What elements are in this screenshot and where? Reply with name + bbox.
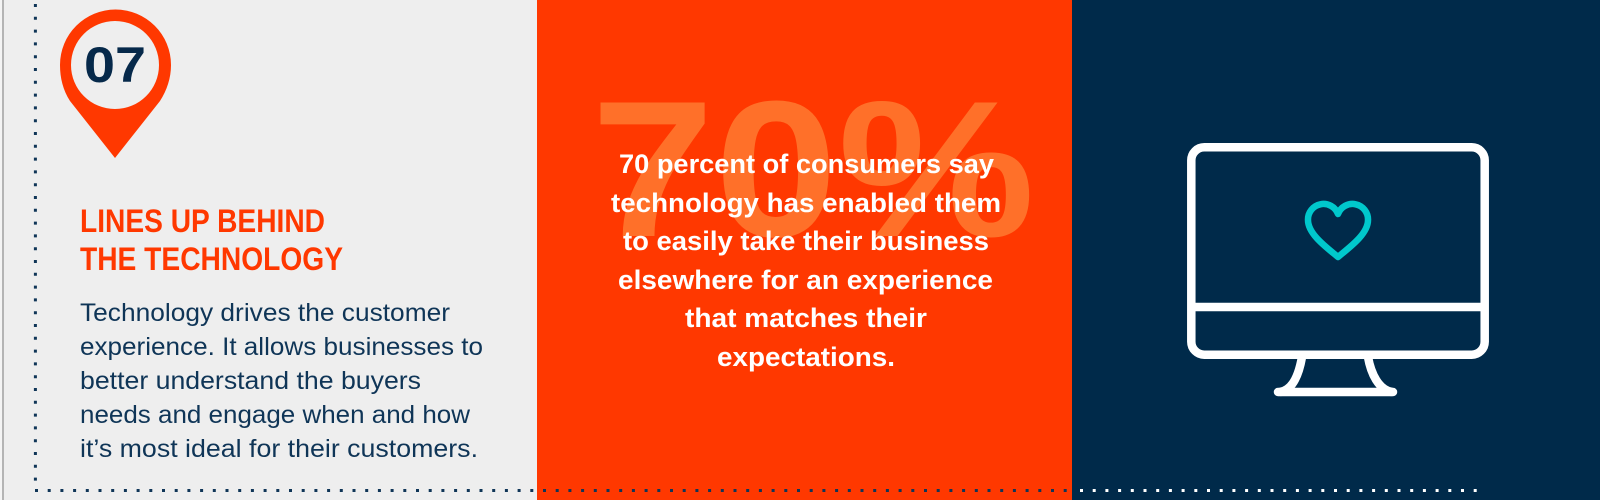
text block: technology description: better understand the buyers xyxy=(80,367,421,395)
heading: lines up behind the technology xyxy=(80,203,343,277)
icon: heart xyxy=(1308,204,1368,257)
text block: statistic description: 70 percent of consumers say xyxy=(619,149,994,179)
large background number 70%: 70% xyxy=(591,61,1035,278)
text block: technology description: experience. It allows businesses to xyxy=(80,333,483,361)
text block: statistic description xyxy=(611,149,1001,372)
panel: 70 percent statistic xyxy=(537,0,1072,500)
text block: technology description xyxy=(80,299,483,463)
icon: map pin with number 07: 07 xyxy=(84,37,146,93)
heading: lines up behind the technology: THE TECHNOLOGY xyxy=(80,241,343,277)
text block: statistic description: elsewhere for an experience xyxy=(618,265,993,295)
icon: map pin with number 07 xyxy=(60,10,171,158)
text block: statistic description: to easily take their business xyxy=(623,226,989,256)
heading: lines up behind the technology: LINES UP BEHIND xyxy=(80,203,325,239)
text block: technology description: Technology drives the customer xyxy=(80,299,450,327)
text block: technology description: it’s most ideal for their customers. xyxy=(80,435,478,463)
text block: technology description: needs and engage when and how xyxy=(80,401,471,429)
panel: monitor icon xyxy=(1072,0,1600,500)
text block: statistic description: technology has enabled them xyxy=(611,188,1001,218)
text block: statistic description: expectations. xyxy=(717,342,895,372)
panel: technology text xyxy=(4,0,537,500)
icon: computer monitor xyxy=(1191,147,1485,392)
text block: statistic description: that matches their xyxy=(685,303,928,333)
